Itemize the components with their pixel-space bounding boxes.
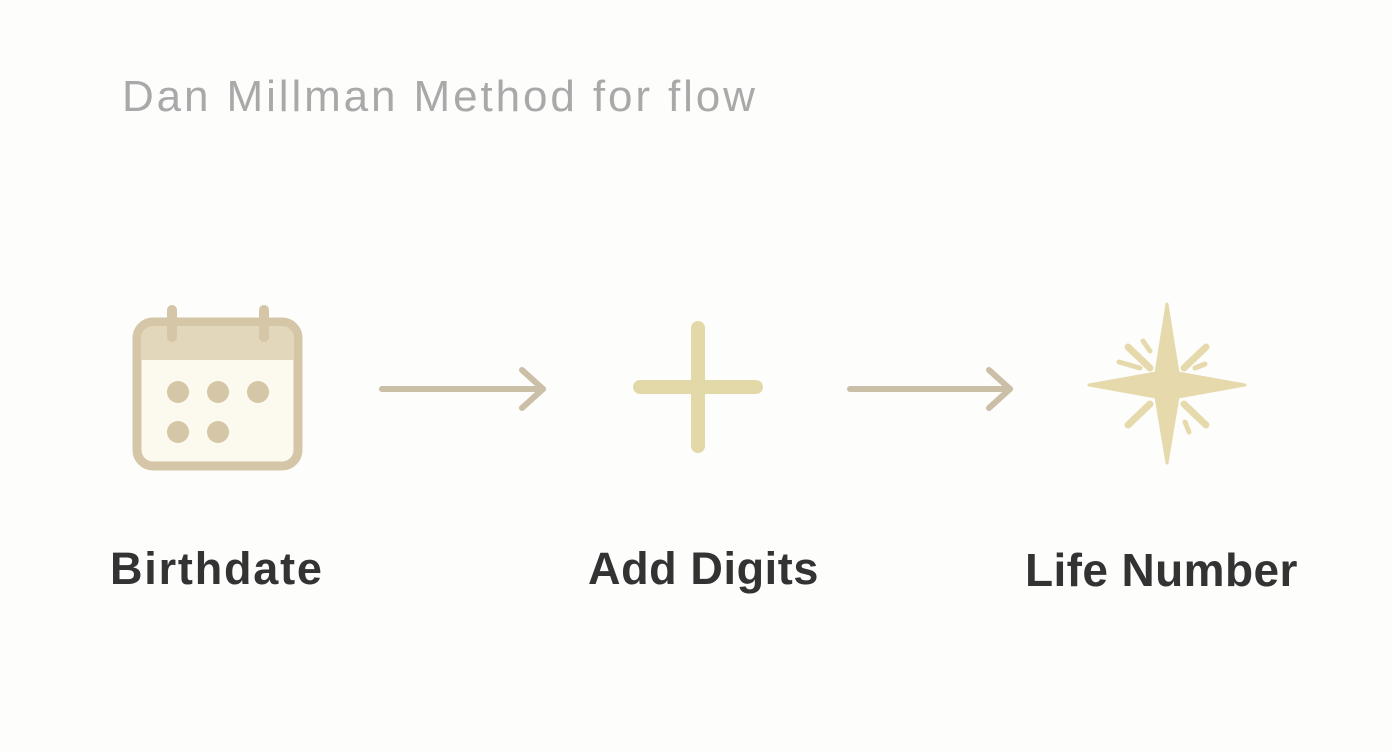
label: Add Digits: Add Digits (588, 543, 819, 594)
title: Dan Millman Method for flow (122, 72, 758, 121)
icon: calendar (137, 310, 298, 466)
label: Birthdate: Birthdate (110, 543, 324, 594)
icon: plus (640, 328, 756, 446)
arrow 1 (382, 370, 543, 408)
label: Life Number: Life Number (1025, 544, 1298, 596)
icon: star (1089, 304, 1245, 463)
arrow 2 (850, 370, 1010, 408)
